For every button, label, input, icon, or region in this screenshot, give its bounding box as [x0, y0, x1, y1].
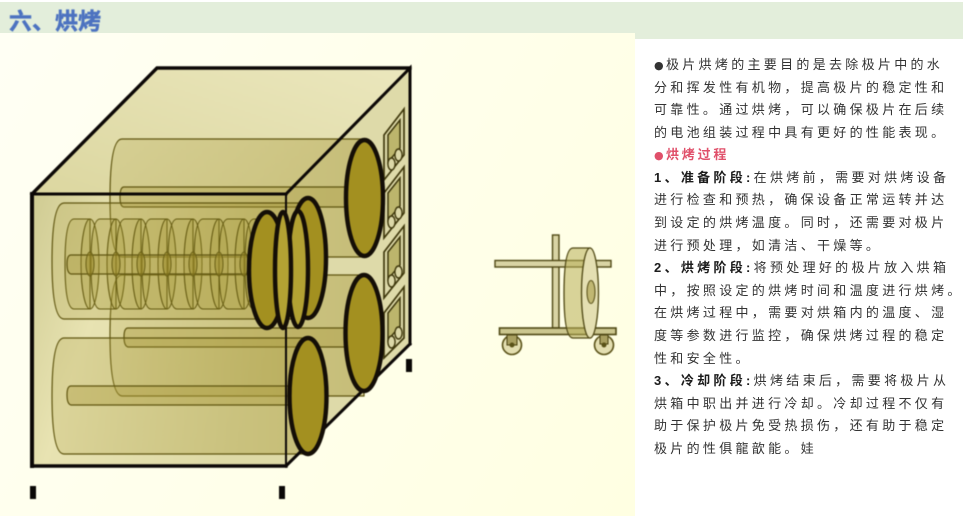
intro line 1: ● — [654, 59, 664, 72]
cart arm — [495, 260, 611, 267]
disk holes — [86, 252, 248, 276]
electrode roll face — [582, 248, 598, 338]
step 2 line 3: 在烘烤过程中，需要对烘箱内的温度、湿 — [654, 305, 947, 320]
step 3 line 1: 3、冷却阶段:烘烤结束后，需要将极片从 — [654, 373, 949, 388]
intro line 4: 的电池组装过程中具有更好的性能表现。 — [654, 125, 947, 140]
oven feet — [30, 359, 412, 499]
oven front face — [32, 194, 286, 466]
oven side face — [286, 68, 410, 466]
oven outline — [32, 68, 410, 466]
back upper rod — [120, 187, 364, 207]
step 1 line 1: 1、准备阶段:在烘烤前，需要对烘烤设备 — [654, 170, 949, 185]
control panel 2 — [384, 167, 404, 238]
intro line 2: 分和挥发性有机物，提高极片的稳定性和 — [654, 80, 947, 95]
electrode roll disks on shaft — [65, 219, 262, 309]
cart with electrode roll — [495, 235, 616, 354]
cart wheels — [502, 335, 614, 354]
front lower cylinder — [52, 338, 308, 454]
cylinder end caps — [249, 140, 383, 454]
title: 六、烘烤 — [9, 8, 101, 34]
step 1 line 4: 进行预处理，如清洁、干燥等。 — [654, 238, 882, 253]
step 1 line 2: 进行检查和预热，确保设备正常运转并达 — [654, 192, 947, 207]
oven top face — [32, 68, 410, 194]
description text — [654, 57, 963, 456]
electrode roll hole — [587, 280, 595, 304]
front upper cylinder — [52, 203, 308, 319]
control panel 1 — [384, 109, 404, 180]
intro line 3: 可靠性。通过烘烤，可以确保极片在后续 — [654, 102, 947, 117]
cart upright — [552, 235, 559, 328]
step 1 line 3: 到设定的烘烤温度。同时，还需要对极片 — [654, 215, 947, 230]
step 2 line 4: 度等参数进行监控，确保烘烤过程的稳定 — [654, 328, 947, 343]
step 3 line 2: 烘箱中职出并进行冷却。冷却过程不仅有 — [654, 396, 947, 411]
back upper cylinder — [110, 139, 364, 257]
control panel 4 — [384, 287, 404, 358]
subheading: baking process: 烘烤过程 — [666, 147, 729, 162]
front lower rod — [67, 386, 308, 405]
step 2 line 2: 中，按照设定的烘烤时间和温度进行烘烤。 — [654, 283, 963, 298]
back lower rod — [124, 328, 364, 347]
step 3 line 4: 极片的性俱龍歆能。娃 — [654, 441, 817, 456]
control panel 3 — [384, 226, 404, 298]
intro line 1: 极片烘烤的主要目的是去除极片中的水 — [666, 57, 943, 72]
subheading: baking process: ● — [654, 149, 664, 162]
roll shaft — [67, 255, 300, 274]
electrode roll body — [564, 248, 590, 338]
step 2 line 5: 性和安全性。 — [654, 351, 752, 366]
step 3 line 3: 助于保护极片免受热损伤，还有助于稳定 — [654, 418, 947, 433]
back lower cylinder — [110, 275, 364, 396]
oven: drying cabinet — [30, 68, 412, 499]
cart base — [500, 328, 616, 334]
step 2 line 1: 2、烘烤阶段:将预处理好的极片放入烘箱 — [654, 260, 949, 275]
